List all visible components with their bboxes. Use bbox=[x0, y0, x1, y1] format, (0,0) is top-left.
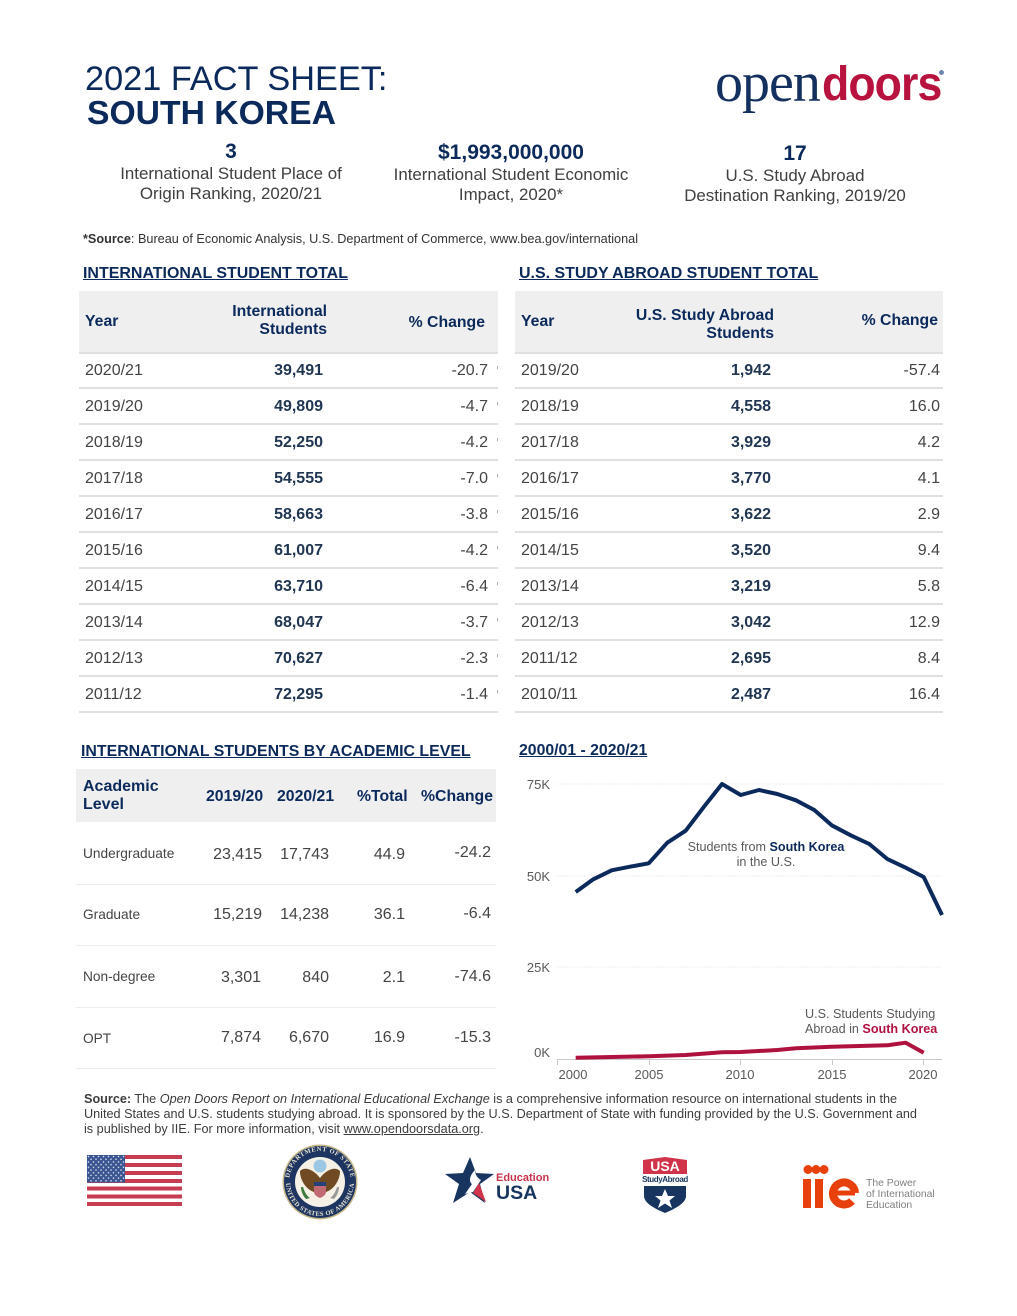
stat: place of origin ranking: 3 bbox=[225, 140, 237, 163]
stat: economic impact: Impact, 2020* bbox=[459, 185, 563, 204]
table: academic level: 7,874 bbox=[221, 1029, 261, 1046]
table: academic level: -74.6 bbox=[455, 968, 491, 985]
table: international student total: -2.3 bbox=[460, 650, 488, 667]
table: academic level: Level bbox=[83, 796, 124, 812]
table: academic level: %Total bbox=[357, 788, 408, 805]
logo: EducationUSA: Education bbox=[496, 1172, 549, 1184]
table: U.S. study abroad student total: 2.9 bbox=[918, 506, 940, 523]
table: international student total: 58,663 bbox=[274, 506, 323, 523]
table: U.S. study abroad student total: 3,219 bbox=[731, 578, 771, 595]
table: international student total: 2014/15 bbox=[85, 578, 143, 595]
source paragraph: is published by IIE. For more information, visit www.opendoorsdata.org. bbox=[84, 1122, 484, 1136]
table: U.S. study abroad student total: 2018/19 bbox=[521, 398, 579, 415]
logo: USA Study Abroad: StudyAbroad bbox=[642, 1175, 688, 1184]
table: academic level bbox=[76, 769, 496, 1069]
x axis labels: 2015 bbox=[818, 1067, 846, 1082]
table: U.S. study abroad student total: 1,942 bbox=[731, 362, 771, 379]
table: academic level: 14,238 bbox=[280, 906, 329, 923]
x axis labels: 2005 bbox=[635, 1067, 663, 1082]
table: U.S. study abroad student total: 4,558 bbox=[731, 398, 771, 415]
table: international student total: 72,295 bbox=[274, 686, 323, 703]
table: international student total: 49,809 bbox=[274, 398, 323, 415]
table: U.S. study abroad student total: 16.4 bbox=[909, 686, 940, 703]
stat: place of origin ranking: Origin Ranking, 2020/21 bbox=[140, 184, 322, 203]
stat: economic impact bbox=[394, 141, 628, 204]
table: international student total: 2013/14 bbox=[85, 614, 143, 631]
table: U.S. study abroad student total: 3,042 bbox=[731, 614, 771, 631]
logo: EducationUSA bbox=[445, 1157, 549, 1204]
table: international student total: -1.4 bbox=[460, 686, 488, 703]
line: U.S. students studying abroad in South Korea bbox=[576, 1043, 924, 1058]
table: international student total: Year bbox=[85, 313, 118, 330]
table: academic level: Undergraduate bbox=[83, 846, 174, 861]
table: academic level: 23,415 bbox=[213, 846, 262, 863]
table: U.S. study abroad student total: 3,929 bbox=[731, 434, 771, 451]
logo: EducationUSA: USA bbox=[496, 1182, 537, 1204]
y axis labels: 50K bbox=[527, 869, 550, 884]
table: academic level: Non-degree bbox=[83, 969, 155, 984]
table: international student total: -4.2 bbox=[460, 434, 488, 451]
source paragraph bbox=[84, 1092, 917, 1136]
title: 2021 FACT SHEET: bbox=[85, 60, 387, 98]
table: academic level: Graduate bbox=[83, 907, 140, 922]
stat: economic impact: $1,993,000,000 bbox=[438, 141, 584, 164]
logo: IIE bbox=[803, 1165, 935, 1211]
table: U.S. study abroad student total: 2017/18 bbox=[521, 434, 579, 451]
chart label: U.S. students abroad: U.S. Students Studying bbox=[805, 1007, 935, 1021]
logo: Department of State seal: DEPARTMENT OF STATE bbox=[285, 1146, 355, 1178]
table: academic level: 2019/20 bbox=[206, 788, 263, 805]
table: academic level: %Change bbox=[421, 788, 493, 805]
y axis labels: 25K bbox=[527, 960, 550, 975]
stat: study abroad ranking: U.S. Study Abroad bbox=[726, 166, 864, 185]
logo: opendoors: open bbox=[715, 52, 820, 114]
table: international student total: 70,627 bbox=[274, 650, 323, 667]
table: U.S. study abroad student total: 4.2 bbox=[918, 434, 940, 451]
y axis labels bbox=[527, 777, 550, 1060]
table: academic level: 3,301 bbox=[221, 969, 261, 986]
table: U.S. study abroad student total: -57.4 bbox=[904, 362, 940, 379]
table: U.S. study abroad student total: 2,487 bbox=[731, 686, 771, 703]
table: international student total: -6.4 bbox=[460, 578, 488, 595]
table: U.S. study abroad student total: 2014/15 bbox=[521, 542, 579, 559]
logo: IIE: Education bbox=[866, 1200, 912, 1211]
table: U.S. study abroad student total: 3,770 bbox=[731, 470, 771, 487]
y axis labels: 0K bbox=[534, 1045, 550, 1060]
table: U.S. study abroad student total: U.S. Study Abroad bbox=[636, 307, 774, 324]
table: international student total: 63,710 bbox=[274, 578, 323, 595]
table: academic level: 15,219 bbox=[213, 906, 262, 923]
table: U.S. study abroad student total: 2011/12 bbox=[521, 650, 578, 667]
logo: Department of State seal: UNITED STATES OF AMERICA bbox=[286, 1182, 354, 1216]
table: international student total: 2020/21 bbox=[85, 362, 143, 379]
table: U.S. study abroad student total: % Change bbox=[862, 312, 938, 329]
table: academic level: Academic bbox=[83, 778, 159, 794]
table: international student total: 68,047 bbox=[274, 614, 323, 631]
table: international student total: Students bbox=[259, 321, 327, 338]
stat: economic impact: International Student Economic bbox=[394, 165, 628, 184]
table: academic level: 6,670 bbox=[289, 1029, 329, 1046]
table: academic level: -15.3 bbox=[455, 1029, 491, 1046]
heading: line chart period: 2000/01 - 2020/21 bbox=[519, 742, 647, 759]
table: U.S. study abroad student total: 5.8 bbox=[918, 578, 940, 595]
table: U.S. study abroad student total: 2,695 bbox=[731, 650, 771, 667]
logo: IIE: of International bbox=[866, 1189, 935, 1200]
table: U.S. study abroad student total: 12.9 bbox=[909, 614, 940, 631]
table: U.S. study abroad student total: 8.4 bbox=[918, 650, 940, 667]
title: SOUTH KOREA bbox=[87, 94, 336, 132]
table: U.S. study abroad student total: 2012/13 bbox=[521, 614, 579, 631]
chart label: students from South Korea: in the U.S. bbox=[737, 855, 795, 869]
x axis labels: 2020 bbox=[909, 1067, 937, 1082]
logo: USA Study Abroad bbox=[642, 1157, 688, 1213]
table: international student total: 2019/20 bbox=[85, 398, 143, 415]
logo: U.S. flag bbox=[87, 1155, 182, 1206]
table: U.S. study abroad student total bbox=[515, 291, 943, 713]
title bbox=[85, 60, 387, 132]
table: international student total: 54,555 bbox=[274, 470, 323, 487]
chart label: students from South Korea: Students from South Korea bbox=[688, 840, 845, 854]
table: international student total: 2017/18 bbox=[85, 470, 143, 487]
y axis labels: 75K bbox=[527, 777, 550, 792]
source paragraph: Source: The Open Doors Report on International Educational Exchange is a comprehensive information resource on international students in the bbox=[84, 1092, 897, 1106]
table: U.S. study abroad student total: 2019/20 bbox=[521, 362, 579, 379]
table: U.S. study abroad student total: Year bbox=[521, 313, 554, 330]
table: U.S. study abroad student total: 2013/14 bbox=[521, 578, 579, 595]
table: U.S. study abroad student total: 4.1 bbox=[918, 470, 940, 487]
table: international student total: 61,007 bbox=[274, 542, 323, 559]
table: U.S. study abroad student total: 2016/17 bbox=[521, 470, 579, 487]
x axis labels bbox=[559, 1067, 937, 1082]
heading: international student total: INTERNATIONAL STUDENT TOTAL bbox=[83, 265, 348, 282]
table: international student total: -7.0 bbox=[460, 470, 488, 487]
heading: U.S. study abroad student total: U.S. STUDY ABROAD STUDENT TOTAL bbox=[519, 265, 818, 282]
line: students from South Korea in the U.S. bbox=[576, 784, 942, 915]
chart label: U.S. students abroad: Abroad in South Korea bbox=[805, 1022, 938, 1036]
logo: USA Study Abroad: USA bbox=[650, 1158, 680, 1174]
stat: place of origin ranking bbox=[120, 140, 342, 203]
table: international student total bbox=[79, 291, 498, 713]
chart label: U.S. students abroad bbox=[805, 1007, 938, 1036]
table: academic level: -6.4 bbox=[463, 905, 491, 922]
table: academic level: 17,743 bbox=[280, 846, 329, 863]
table: international student total: 2018/19 bbox=[85, 434, 143, 451]
table: U.S. study abroad student total: 3,622 bbox=[731, 506, 771, 523]
logo: opendoors: doors bbox=[822, 58, 941, 111]
table: international student total: 2016/17 bbox=[85, 506, 143, 523]
table: U.S. study abroad student total: 3,520 bbox=[731, 542, 771, 559]
table: U.S. study abroad student total: 9.4 bbox=[918, 542, 940, 559]
x axis labels: 2000 bbox=[559, 1067, 587, 1082]
table: international student total: 2012/13 bbox=[85, 650, 143, 667]
stat: study abroad ranking: 17 bbox=[783, 142, 807, 165]
table: U.S. study abroad student total: 2015/16 bbox=[521, 506, 579, 523]
table: international student total: -4.7 bbox=[460, 398, 488, 415]
logo: opendoors bbox=[715, 52, 944, 114]
logo: IIE: The Power bbox=[866, 1178, 916, 1189]
table: international student total: International bbox=[232, 303, 327, 320]
table: international student total: 52,250 bbox=[274, 434, 323, 451]
table: U.S. study abroad student total: 16.0 bbox=[909, 398, 940, 415]
stat: study abroad ranking: Destination Ranking, 2019/20 bbox=[684, 186, 906, 204]
table: academic level: 16.9 bbox=[374, 1029, 405, 1046]
table: international student total: 2011/12 bbox=[85, 686, 142, 703]
x axis labels: 2010 bbox=[726, 1067, 754, 1082]
stat: place of origin ranking: International Student Place of bbox=[120, 164, 342, 183]
table: academic level: 44.9 bbox=[374, 846, 405, 863]
table: academic level: 2020/21 bbox=[277, 788, 334, 805]
source paragraph: United States and U.S. students studying abroad. It is sponsored by the U.S. Department of State with funding provided by the U.S. Government and bbox=[84, 1107, 917, 1121]
table: academic level: -24.2 bbox=[455, 844, 491, 861]
table: international student total: -20.7 bbox=[452, 362, 488, 379]
logo: Department of State seal bbox=[282, 1144, 358, 1220]
stat: study abroad ranking bbox=[684, 142, 906, 204]
source note: *Source: Bureau of Economic Analysis, U.S. Department of Commerce, www.bea.gov/international bbox=[83, 232, 638, 246]
table: U.S. study abroad student total: Students bbox=[706, 325, 774, 342]
table: U.S. study abroad student total: 2010/11 bbox=[521, 686, 578, 703]
chart label: students from South Korea bbox=[688, 840, 845, 869]
table: academic level: 2.1 bbox=[383, 969, 405, 986]
table: international student total: -3.7 bbox=[460, 614, 488, 631]
table: international student total: -4.2 bbox=[460, 542, 488, 559]
table: international student total: 39,491 bbox=[274, 362, 323, 379]
table: academic level: 840 bbox=[302, 969, 329, 986]
heading: by academic level: INTERNATIONAL STUDENTS BY ACADEMIC LEVEL bbox=[81, 743, 471, 760]
table: international student total: % Change bbox=[409, 314, 485, 331]
table: academic level: 36.1 bbox=[374, 906, 405, 923]
table: international student total: 2015/16 bbox=[85, 542, 143, 559]
table: academic level: OPT bbox=[83, 1031, 111, 1046]
table: international student total: -3.8 bbox=[460, 506, 488, 523]
